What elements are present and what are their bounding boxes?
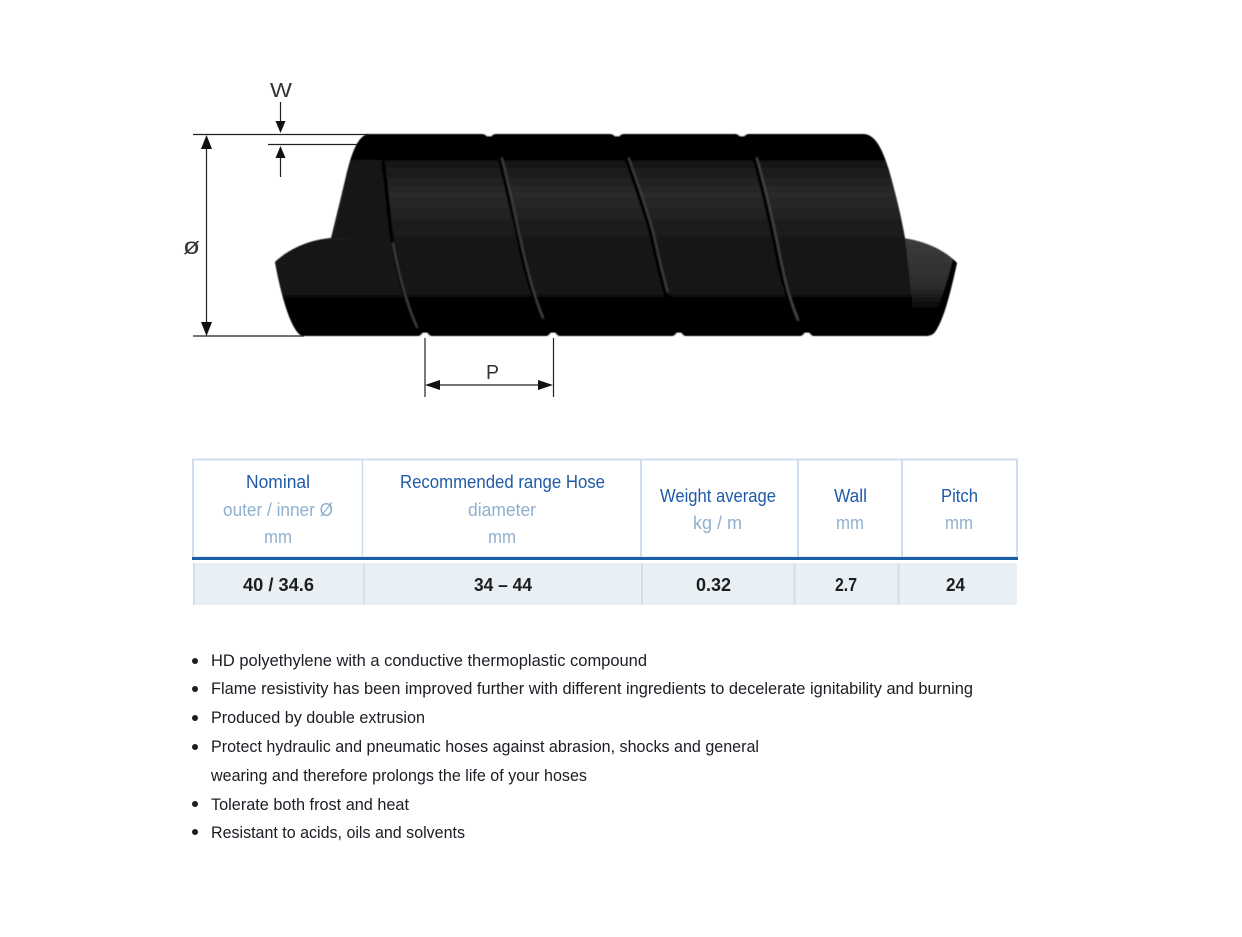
feature text: HD polyethylene with a conductive thermoplastic compound [211,652,647,670]
data row values: 0.32 [696,575,731,595]
dimension W: W [270,80,292,102]
feature text: Tolerate both frost and heat [211,796,409,814]
dimension P: P [486,362,499,384]
spiral hose illustration [275,133,957,337]
table header: pitch: Pitch [941,486,978,506]
table header: nominal: mm [264,527,292,547]
table header: nominal: Nominal [246,472,310,492]
table header: weight: kg / m [693,513,742,533]
table header: wall [834,486,867,533]
feature text: Flame resistivity has been improved further with different ingredients to decelerate ignitability and burning [211,680,973,698]
helical grooves [383,157,806,333]
dimension diameter [183,135,304,336]
table header: recommended range [400,472,605,547]
data row values: 2.7 [835,575,857,595]
dimension P [425,338,554,397]
specification table [192,459,1018,605]
table header: wall: mm [836,513,864,533]
table header: recommended range: Recommended range Hose [400,472,605,492]
dimension diameter: ø [183,233,200,259]
feature text: wearing and therefore prolongs the life of your hoses [210,767,587,785]
data row values: 40 / 34.6 [243,575,314,595]
data row background [193,563,1017,605]
header rule [192,557,1018,560]
table header grid [193,459,1017,558]
table header: weight [660,486,776,533]
table header: recommended range: mm [488,527,516,547]
data row values: 24 [946,575,965,595]
dimension W [193,80,368,177]
table header: nominal: outer / inner Ø [223,500,333,520]
feature text [210,652,973,842]
edge notches [419,133,813,337]
data row values: 34 – 44 [474,575,532,595]
table header: weight: Weight average [660,486,776,506]
feature list [192,652,973,842]
data row values [243,575,965,595]
feature text: Resistant to acids, oils and solvents [211,824,465,842]
feature text: Produced by double extrusion [211,709,425,727]
table header: nominal [223,472,333,547]
hose diagram [183,80,957,397]
feature text: Protect hydraulic and pneumatic hoses against abrasion, shocks and general [211,738,759,756]
bullet markers [192,658,198,835]
table header: recommended range: diameter [468,500,536,520]
table header: pitch: mm [945,513,973,533]
table header: wall: Wall [834,486,867,506]
table header: pitch [941,486,978,533]
